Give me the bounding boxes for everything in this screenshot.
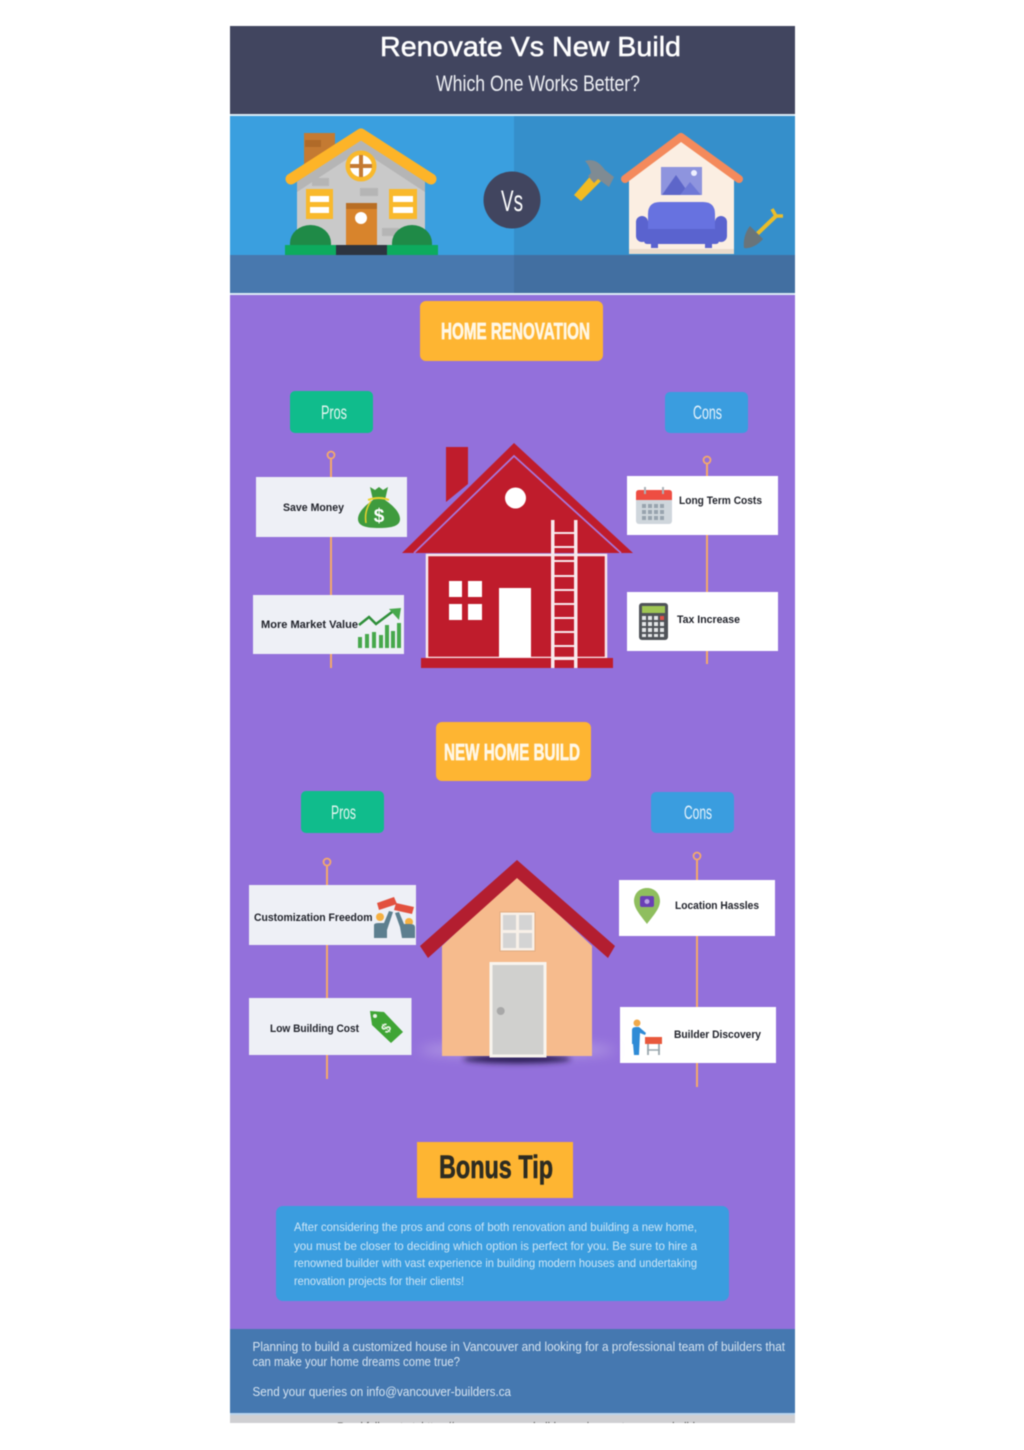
icon: price tag <box>370 1011 403 1043</box>
card: low building cost <box>249 998 412 1055</box>
connector: renovation pros <box>328 452 334 668</box>
icon: people with signs <box>374 897 415 938</box>
footer panel: can make your home dreams come true? <box>252 1355 460 1369</box>
card: location hassles <box>619 880 775 936</box>
card: save money: Save Money <box>283 502 345 514</box>
connector: new build pros <box>324 858 330 1079</box>
header panel <box>230 26 795 114</box>
card: tax increase: Tax Increase <box>677 614 740 626</box>
connector: new build cons <box>694 852 700 1087</box>
card: more market value: More Market Value <box>261 619 358 631</box>
illustration: red house <box>402 443 633 668</box>
card: builder discovery <box>620 1007 776 1063</box>
card: long term costs <box>627 476 778 535</box>
card: customization freedom <box>249 885 416 945</box>
icon: money bag <box>358 487 400 528</box>
icon: calendar <box>636 487 672 524</box>
icon: builder with barrier <box>632 1020 662 1055</box>
icon: hammer <box>574 160 614 201</box>
illustration: peach house <box>419 860 615 1064</box>
icon: vs badge <box>484 172 540 228</box>
panel: bonus tip text: After considering the pros and cons of both renovation and building a new home, <box>294 1220 697 1234</box>
source strip <box>230 1415 795 1435</box>
badge: renovation pros: Pros <box>321 403 347 424</box>
card: tax increase <box>627 592 778 651</box>
badge: new build cons: Cons <box>684 803 712 824</box>
icon: renovated house <box>285 133 438 255</box>
icon: price tag: $ <box>378 1019 395 1036</box>
icon: calculator <box>639 603 668 640</box>
heading: bonus tip <box>417 1142 573 1198</box>
connector: renovation cons <box>704 456 710 664</box>
icon: shovel <box>744 209 783 248</box>
badge: renovation cons: Cons <box>693 403 722 424</box>
heading: new home build: NEW HOME BUILD <box>444 739 580 765</box>
icon: growth chart <box>358 608 401 648</box>
footer panel: Planning to build a customized house in Vancouver and looking for a professional team of builders that <box>252 1340 785 1354</box>
card: location hassles: Location Hassles <box>675 900 759 912</box>
card: more market value <box>253 595 404 654</box>
heading: home renovation: HOME RENOVATION <box>441 318 590 344</box>
icon: money bag: $ <box>374 506 385 527</box>
panel: bonus tip text <box>276 1206 729 1301</box>
footer panel <box>230 1329 795 1415</box>
heading: home renovation <box>420 301 603 361</box>
panel: bonus tip text: you must be closer to deciding which option is perfect for you. Be sure to hire a <box>294 1239 697 1253</box>
heading: bonus tip: Bonus Tip <box>439 1149 553 1185</box>
card: long term costs: Long Term Costs <box>679 495 762 507</box>
card: low building cost: Low Building Cost <box>270 1023 359 1035</box>
main purple panel <box>230 295 795 1330</box>
source strip: Read full post at: https://www.vancouver-builders.ca/renovate-vs-new-build <box>337 1421 695 1433</box>
banner panel <box>230 114 795 295</box>
icon: map pin <box>634 888 660 924</box>
footer panel: Send your queries on info@vancouver-builders.ca <box>252 1385 511 1399</box>
card: customization freedom: Customization Freedom <box>254 912 373 924</box>
subtitle: Which One Works Better? <box>436 71 640 96</box>
badge: renovation cons <box>665 392 748 433</box>
badge: new build pros: Pros <box>331 803 356 824</box>
badge: new build cons <box>651 792 734 833</box>
panel: bonus tip text: renovation projects for their clients! <box>294 1274 464 1288</box>
badge: new build pros <box>301 791 384 833</box>
card: builder discovery: Builder Discovery <box>674 1029 762 1041</box>
panel: bonus tip text: renowned builder with vast experience in building modern houses and undertaking <box>294 1256 697 1270</box>
card: save money <box>256 477 407 537</box>
icon: interior house <box>625 137 739 254</box>
badge: renovation pros <box>290 391 373 433</box>
heading: new home build <box>436 722 591 781</box>
title: Renovate Vs New Build <box>380 31 681 62</box>
ladder <box>551 520 578 668</box>
icon: vs badge: Vs <box>501 185 523 218</box>
